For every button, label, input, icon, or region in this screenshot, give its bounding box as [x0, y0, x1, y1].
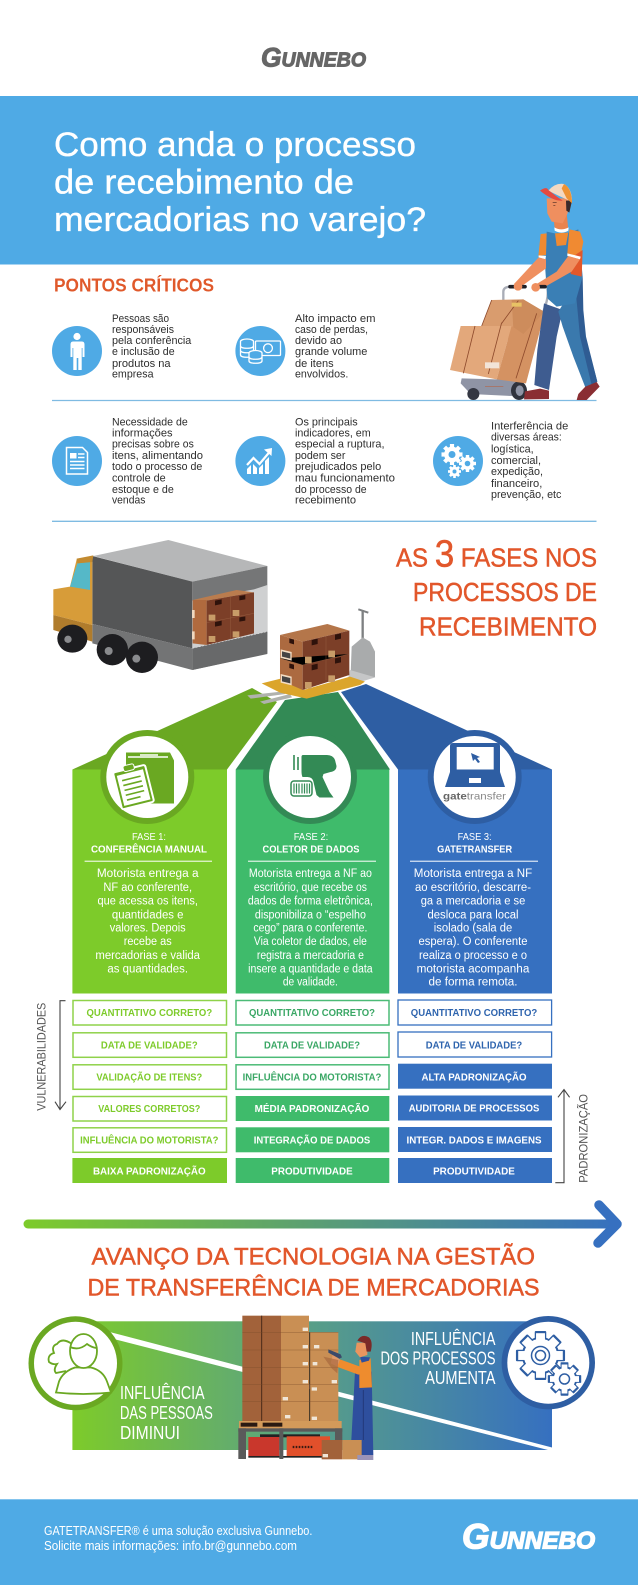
text: fase 1 description: recebe as — [124, 936, 172, 948]
checklist: fase 1 — [72, 1000, 227, 1183]
panel: fase 2 — [236, 692, 390, 994]
text: fase 2 description: Via coletor de dados, ele — [254, 936, 367, 948]
checklist: fase 1: QUANTITATIVO CORRETO? — [86, 1007, 212, 1019]
annotation: padronizacao: PADRONIZAÇÃO — [576, 1094, 590, 1183]
checklist: fase 3: QUANTITATIVO CORRETO? — [411, 1007, 537, 1019]
card roof dark blue — [341, 684, 552, 770]
checklist: fase 3: DATA DE VALIDADE? — [426, 1040, 522, 1052]
text: indicadores: Os principais — [295, 417, 358, 429]
text: footer — [44, 1524, 312, 1553]
text: necessidade: Necessidade de — [112, 417, 188, 429]
icon: growth chart — [235, 436, 285, 486]
title: mercadorias no varejo? — [54, 201, 426, 239]
heading: avanco da tecnologia: DE TRANSFERÊNCIA DE MERCADORIAS — [88, 1274, 540, 1301]
icon: money — [235, 326, 285, 376]
text: fase 3 heading: GATETRANSFER — [437, 844, 512, 856]
logo: Gunnebo top: GUNNEBO — [261, 42, 366, 72]
text: necessidade: estoque e de — [112, 484, 174, 496]
text: fase 3 heading: FASE 3: — [458, 832, 492, 843]
heading: as 3 fases: RECEBIMENTO — [419, 612, 597, 642]
arrow: technology progress — [24, 1205, 617, 1243]
icon: person — [52, 326, 102, 376]
checklist: fase 2: DATA DE VALIDADE? — [264, 1040, 360, 1052]
text: fase 1 description: quantidades e — [112, 909, 184, 921]
annotation: padronizacao — [555, 1090, 590, 1183]
text: influencia dos processos — [380, 1329, 496, 1388]
text: indicadores: indicadores, em — [295, 428, 371, 440]
checklist: fase 2: INFLUÊNCIA DO MOTORISTA? — [243, 1070, 381, 1083]
heading: as 3 fases: PROCESSOS DE — [413, 577, 597, 607]
logo: Gunnebo footer: GUNNEBO — [462, 1518, 595, 1556]
icon: gatetransfer laptop — [428, 730, 522, 824]
text: indicadores: recebimento — [295, 495, 356, 507]
checklist: fase 1: VALIDAÇÃO DE ITENS? — [96, 1070, 202, 1083]
text: fase 2 description: disponibiliza o “espelho — [255, 909, 366, 921]
text: fase 2 description: escritório, que recebe os — [254, 882, 367, 894]
text: fase 3 description: desloca para local — [428, 909, 518, 921]
text: fase 1 heading: FASE 1: — [132, 832, 166, 843]
checklist: fase 2: INTEGRAÇÃO DE DADOS — [254, 1133, 370, 1146]
text: necessidade: controle de — [112, 472, 166, 484]
checklist: fase 2: PRODUTIVIDADE — [271, 1165, 353, 1177]
text: influencia das pessoas: INFLUÊNCIA — [120, 1383, 205, 1403]
illustration: worker scanning pallet — [238, 1316, 373, 1460]
text: necessidade — [112, 417, 203, 507]
heading: pontos criticos: PONTOS CRÍTICOS — [54, 274, 214, 296]
text: fase 2 description — [248, 868, 373, 989]
text: fase 1 description: Motorista entrega a — [97, 868, 199, 880]
text: interferencia: comercial, — [491, 455, 541, 467]
checklist: fase 3: ALTA PADRONIZAÇÃO — [422, 1070, 526, 1083]
text: fase 1 heading — [91, 832, 208, 856]
card body medium green — [236, 770, 389, 994]
card body blue — [398, 770, 552, 994]
icon: people — [28, 1316, 122, 1410]
title: de recebimento de — [54, 164, 354, 202]
text: fase 2 heading: COLETOR DE DADOS — [262, 844, 360, 856]
icon: gears white — [433, 436, 483, 486]
text: fase 1 description — [95, 868, 201, 975]
text: pessoas — [112, 313, 192, 381]
text: fase 2 description: Motorista entrega a NF ao — [249, 868, 372, 880]
text: interferencia: financeiro, — [491, 478, 542, 490]
text: fase 3 description: espera). O conferente — [418, 936, 528, 948]
text: fase 1 description: valores. Depois — [110, 922, 186, 934]
illustration: pallet jack with boxes — [247, 609, 375, 704]
text: alto impacto: caso de perdas, — [295, 324, 368, 336]
text: fase 2 description: de validade. — [283, 977, 338, 989]
text: fase 3 description: realiza o processo e o — [419, 950, 527, 962]
checklist: fase 1: VALORES CORRETOS? — [98, 1103, 200, 1115]
icon: gatetransfer laptop: gatetransfer — [443, 790, 507, 802]
text: influencia das pessoas: DIMINUI — [120, 1423, 180, 1443]
text: fase 1 description: NF ao conferente, — [103, 882, 192, 894]
checklist: fase 2: MÉDIA PADRONIZAÇÃO — [255, 1102, 369, 1115]
checklist: fase 3: AUDITORIA DE PROCESSOS — [409, 1102, 539, 1114]
text: fase 2 description: insere a quantidade e data — [248, 963, 373, 975]
text: fase 3 description: Motorista entrega a NF — [414, 868, 532, 880]
text: alto impacto: grande volume — [295, 346, 367, 358]
text: influencia das pessoas: DAS PESSOAS — [120, 1403, 213, 1423]
checklist: fase 3: INTEGR. DADOS E IMAGENS — [406, 1134, 542, 1146]
card roof dark green — [236, 692, 390, 770]
text: necessidade: informações — [112, 428, 173, 440]
icon: document — [52, 436, 102, 486]
text: alto impacto: Alto impacto em — [295, 313, 376, 325]
text: footer: GATETRANSFER® é uma solução exclusiva Gunnebo. — [44, 1524, 312, 1538]
text: pessoas: produtos na — [112, 358, 171, 370]
checklist: fase 3 — [398, 1000, 552, 1183]
card roof green — [72, 688, 277, 770]
text: indicadores: podem ser — [295, 450, 346, 462]
checklist: fase 1: DATA DE VALIDADE? — [101, 1040, 198, 1052]
text: fase 1 description: que acessa os itens, — [97, 895, 198, 907]
text: alto impacto: de itens — [295, 358, 334, 370]
text: footer: Solicite mais informações: info.br@gunnebo.com — [44, 1539, 297, 1553]
text: interferencia: diversas áreas: — [491, 432, 562, 444]
text: indicadores — [295, 417, 395, 507]
text: fase 2 heading: FASE 2: — [294, 832, 328, 843]
text: indicadores: do processo de — [295, 484, 367, 496]
text: interferencia — [491, 420, 568, 501]
text: indicadores: especial a ruptura, — [295, 439, 384, 451]
card body green — [72, 770, 227, 994]
icon: barcode scanner — [263, 730, 357, 824]
text: influencia das pessoas — [120, 1383, 213, 1443]
text: fase 2 heading — [262, 832, 360, 856]
text: influencia dos processos: DOS PROCESSOS — [380, 1348, 496, 1368]
icon: box and clipboard — [100, 730, 194, 824]
text: fase 2 description: cego” para o conferente. — [253, 922, 367, 934]
text: interferencia: prevenção, etc — [491, 489, 562, 501]
panel: influence band — [72, 1321, 552, 1450]
panel: fase 1 — [72, 688, 277, 994]
illustration: worker pushing hand truck — [450, 184, 600, 400]
text: indicadores: mau funcionamento — [295, 472, 395, 484]
text: interferencia: logística, — [491, 444, 534, 456]
text: fase 1 description: as quantidades. — [107, 963, 188, 975]
text: pessoas: e inclusão de — [112, 346, 175, 358]
text: fase 3 description: motorista acompanha — [417, 963, 530, 975]
text: necessidade: vendas — [112, 495, 146, 507]
text: pessoas: empresa — [112, 369, 154, 381]
text: interferencia: Interferência de — [491, 420, 568, 432]
text: pessoas: Pessoas são — [112, 313, 169, 325]
text: influencia dos processos: INFLUÊNCIA — [411, 1329, 496, 1349]
annotation: vulnerabilidades: VULNERABILIDADES — [34, 1003, 48, 1111]
text: necessidade: todo o processo de — [112, 461, 202, 473]
text: fase 3 description: de forma remota. — [428, 977, 518, 989]
illustration: truck — [53, 540, 267, 673]
text: indicadores: prejudicados pelo — [295, 461, 381, 473]
text: necessidade: precisas sobre os — [112, 439, 194, 451]
text: fase 2 description: registra a mercadoria e — [257, 950, 364, 962]
text: fase 3 description: ga a mercadoria e se — [421, 895, 525, 907]
text: necessidade: itens, alimentando — [112, 450, 203, 462]
divider lines — [52, 400, 596, 521]
text: alto impacto — [295, 313, 376, 381]
heading: as 3 fases: AS 3 FASES NOS — [396, 534, 597, 576]
heading: avanco da tecnologia — [88, 1243, 540, 1301]
text: fase 2 description: dados de forma eletrônica, — [248, 895, 373, 907]
text: pessoas: pela conferência — [112, 335, 192, 347]
text: pessoas: responsáveis — [112, 324, 174, 336]
text: alto impacto: devido ao — [295, 335, 342, 347]
header banner — [0, 96, 638, 264]
checklist: fase 2: QUANTITATIVO CORRETO? — [249, 1007, 375, 1019]
text: influencia dos processos: AUMENTA — [425, 1368, 495, 1388]
heading: avanco da tecnologia: AVANÇO DA TECNOLOGIA NA GESTÃO — [92, 1243, 535, 1270]
text: interferencia: expedição, — [491, 466, 543, 478]
panel: fase 3 — [341, 684, 552, 994]
title — [54, 126, 426, 239]
heading: as 3 fases — [396, 534, 597, 642]
icon: gears outline — [502, 1316, 595, 1409]
checklist: fase 3: PRODUTIVIDADE — [433, 1165, 515, 1177]
text: fase 3 description: isolado (sala de — [434, 922, 512, 934]
text: alto impacto: envolvidos. — [295, 369, 348, 381]
title: Como anda o processo — [54, 126, 416, 164]
checklist: fase 1: BAIXA PADRONIZAÇÃO — [93, 1164, 206, 1177]
text: fase 3 description — [414, 868, 532, 989]
text: fase 3 heading — [437, 832, 512, 856]
text: fase 1 heading: CONFERÊNCIA MANUAL — [91, 843, 208, 856]
annotation: vulnerabilidades — [34, 1001, 66, 1111]
footer band — [0, 1499, 638, 1585]
checklist: fase 2 — [236, 1000, 389, 1183]
text: fase 3 description: ao escritório, descarre- — [415, 882, 531, 894]
checklist: fase 1: INFLUÊNCIA DO MOTORISTA? — [80, 1133, 218, 1146]
text: fase 1 description: mercadorias e valida — [95, 950, 201, 962]
